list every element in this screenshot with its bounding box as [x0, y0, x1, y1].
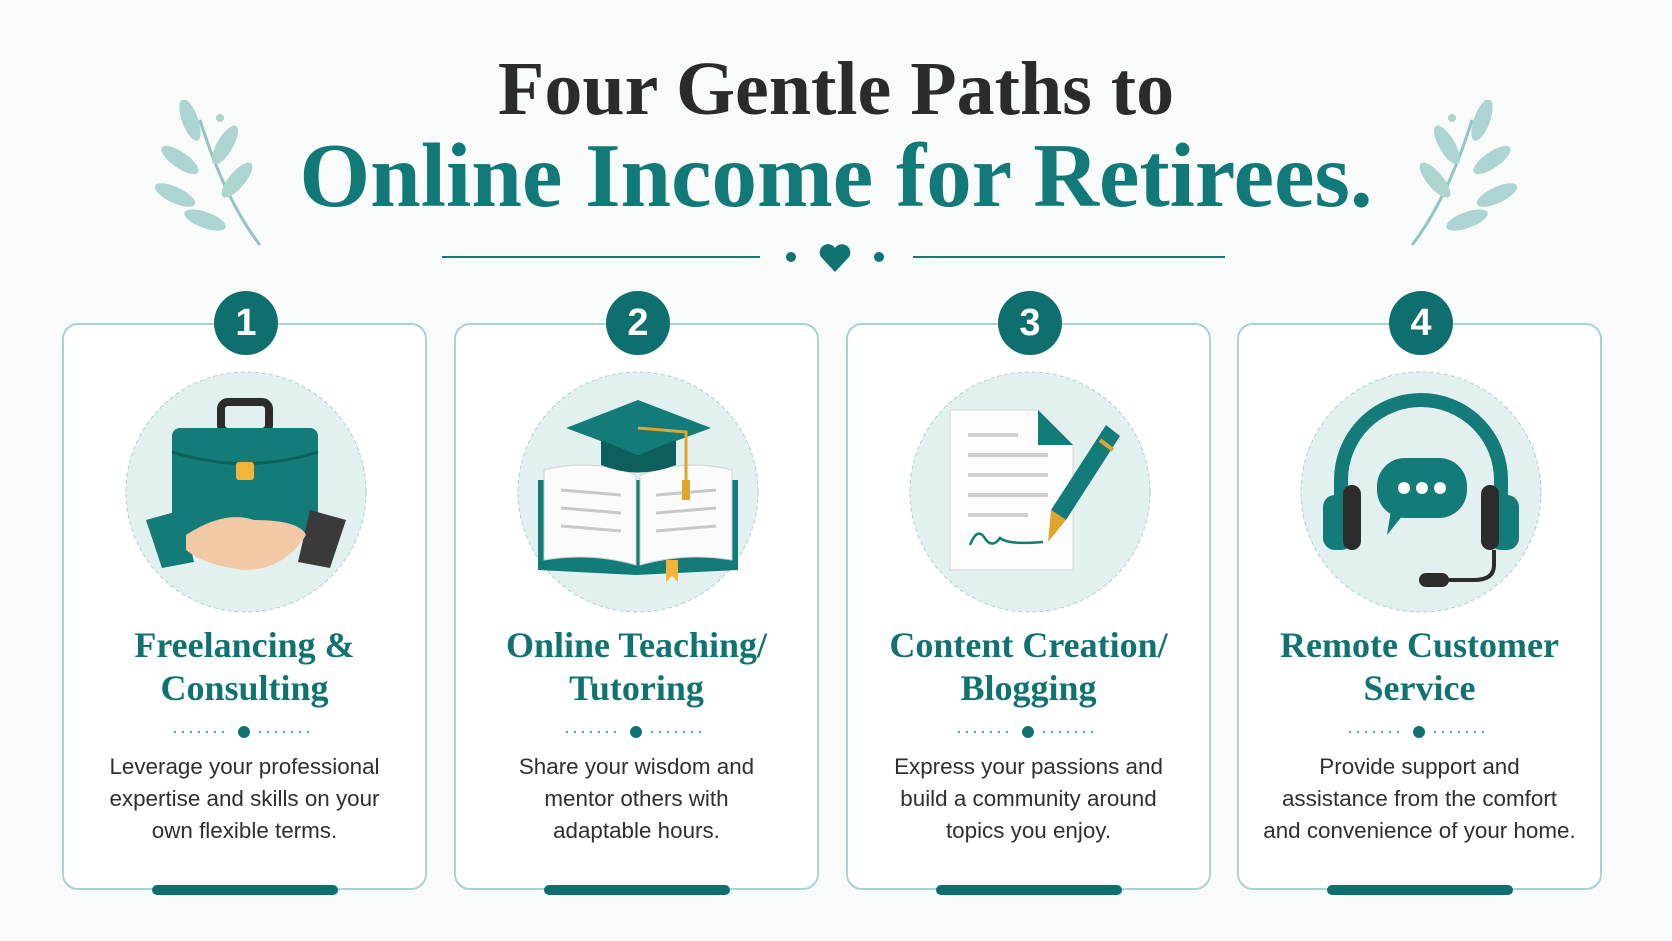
description	[519, 754, 754, 843]
description: Express your passions and	[894, 754, 1163, 779]
divider dots	[174, 726, 309, 738]
heading: Online Teaching/	[506, 625, 767, 665]
heading	[134, 625, 355, 708]
description: Provide support and	[1319, 754, 1520, 779]
icon: book and cap	[518, 372, 758, 612]
heading: Tutoring	[569, 668, 704, 708]
description	[894, 754, 1163, 843]
heading: Content Creation/	[889, 625, 1168, 665]
number badge 3: 3	[1019, 302, 1041, 344]
title line 1: Four Gentle Paths to	[498, 47, 1174, 131]
description: assistance from the comfort	[1282, 786, 1557, 811]
heading	[506, 625, 768, 708]
description: build a community around	[900, 786, 1157, 811]
heading: Blogging	[960, 668, 1097, 708]
description: adaptable hours.	[553, 818, 720, 843]
divider dots	[958, 726, 1093, 738]
description: Leverage your professional	[109, 754, 380, 779]
title line 2: Online Income for Retirees.	[299, 125, 1373, 226]
panel: freelancing	[62, 323, 427, 890]
description: and convenience of your home.	[1263, 818, 1576, 843]
description	[109, 754, 380, 843]
icon: headset	[1300, 372, 1542, 612]
heading: Freelancing &	[134, 625, 355, 665]
number badge 4: 4	[1410, 302, 1432, 344]
bottom bar	[544, 885, 730, 895]
description: topics you enjoy.	[946, 818, 1111, 843]
number badge 2: 2	[627, 302, 649, 344]
number badge 1: 1	[235, 302, 257, 344]
panel: content creation	[846, 323, 1211, 890]
icon: document and pen	[910, 372, 1150, 612]
panel: teaching	[454, 323, 819, 890]
description: Share your wisdom and	[519, 754, 754, 779]
bottom bar	[152, 885, 338, 895]
heading	[1280, 625, 1559, 708]
description: expertise and skills on your	[109, 786, 380, 811]
number badge 3	[998, 291, 1062, 355]
icon: left leaves	[154, 100, 262, 246]
icon: right leaves	[1410, 100, 1518, 246]
divider with heart	[442, 244, 1225, 272]
divider dots	[566, 726, 701, 738]
number badge 4	[1389, 291, 1453, 355]
heading: Remote Customer	[1280, 625, 1559, 665]
description	[1263, 754, 1576, 843]
heading: Consulting	[160, 668, 329, 708]
heading	[889, 625, 1168, 708]
description: own flexible terms.	[152, 818, 337, 843]
heading: Service	[1364, 668, 1475, 708]
divider dots	[1349, 726, 1484, 738]
description: mentor others with	[544, 786, 729, 811]
bottom bar	[936, 885, 1122, 895]
number badge 1	[214, 291, 278, 355]
icon: briefcase handshake	[126, 372, 366, 612]
bottom bar	[1327, 885, 1513, 895]
panel: customer service	[1237, 323, 1602, 890]
number badge 2	[606, 291, 670, 355]
